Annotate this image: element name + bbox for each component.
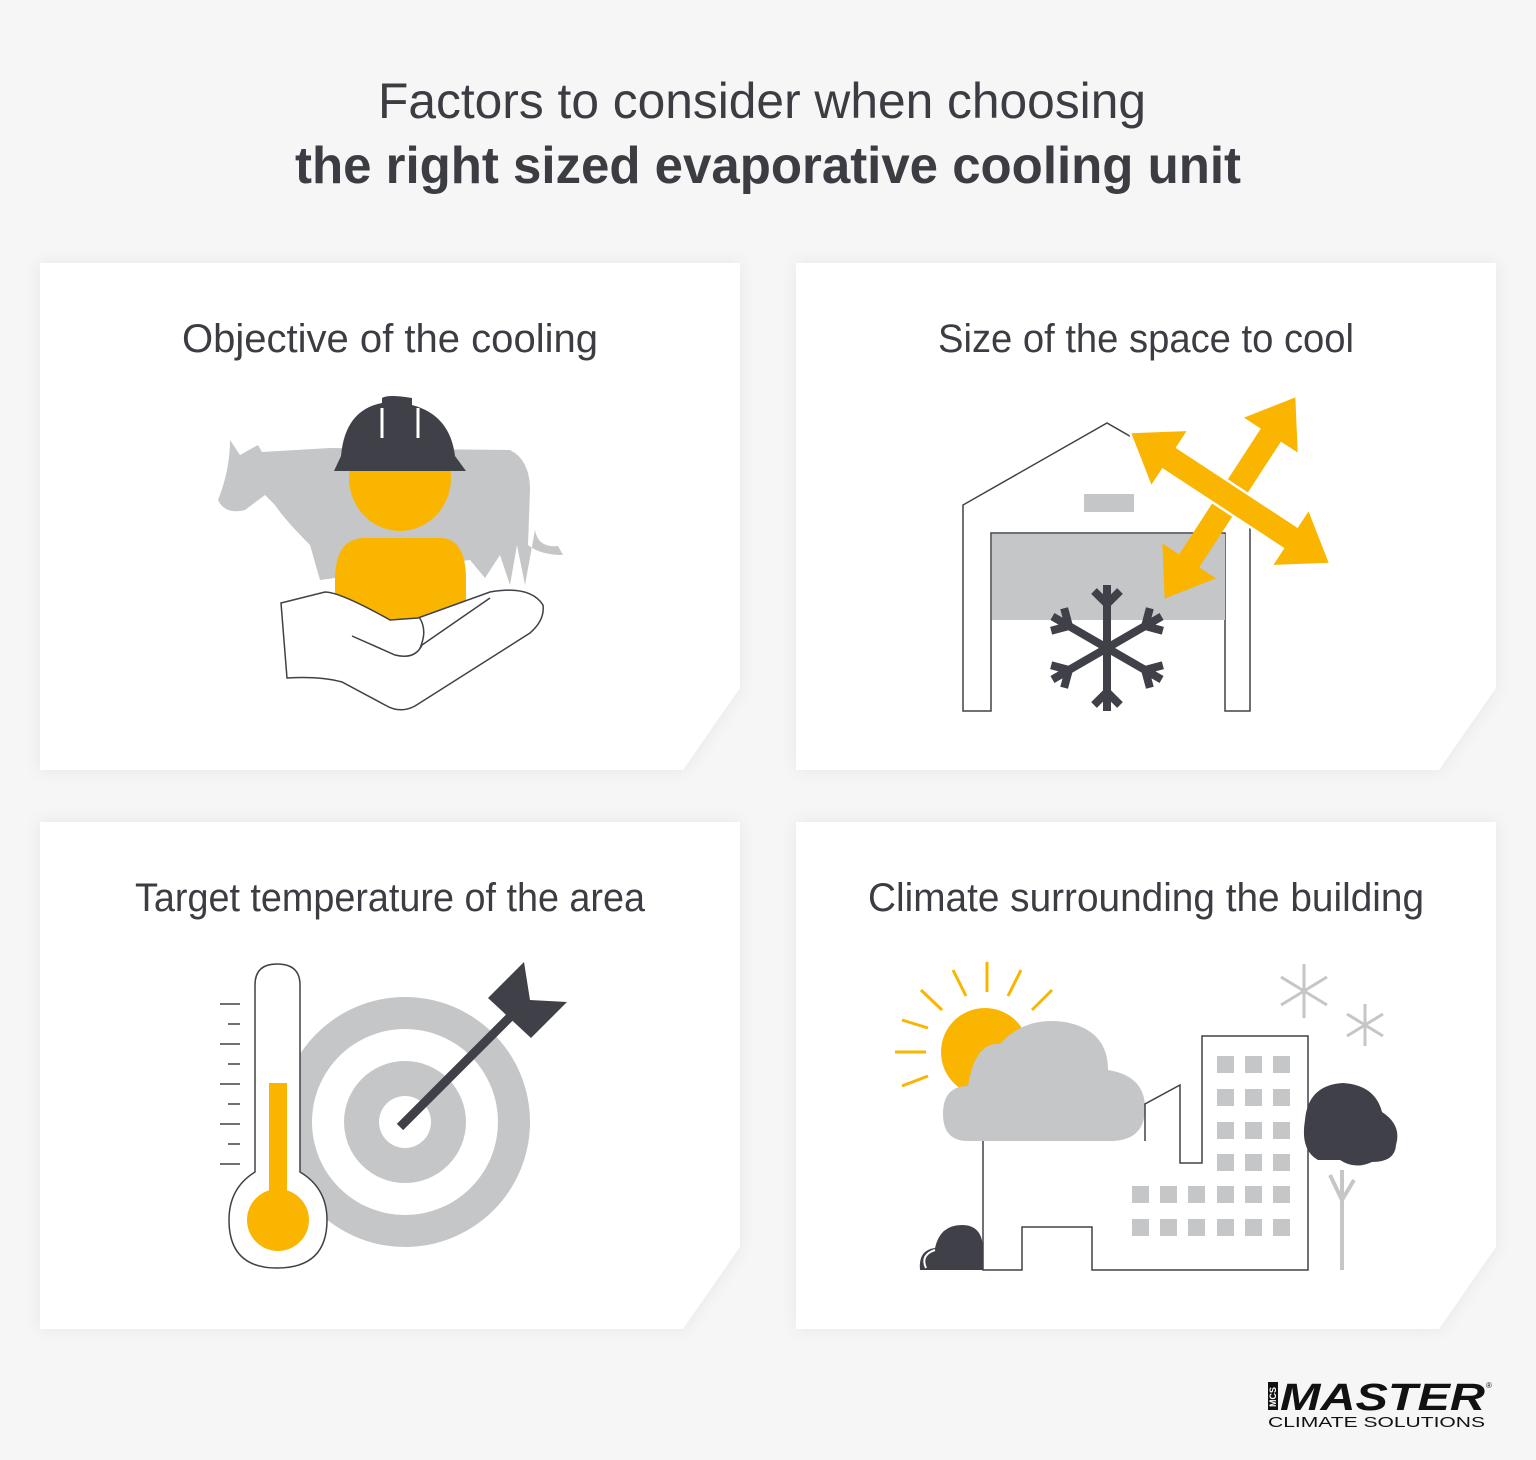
heading: size: Size of the space to cool (938, 317, 1354, 361)
panel: target temperature (40, 822, 740, 1329)
heading: objective: Objective of the cooling (182, 317, 598, 361)
icon: building with arrows (963, 380, 1346, 711)
icon: city climate (895, 962, 1397, 1270)
title (295, 73, 1241, 195)
icon: cow worker hand (218, 396, 563, 710)
icon: thermometer and target (220, 962, 567, 1268)
logo: ® (1486, 1381, 1492, 1390)
panel: size (796, 263, 1496, 770)
panel: climate (796, 822, 1496, 1329)
heading: climate: Climate surrounding the building (868, 876, 1424, 920)
logo (1268, 1377, 1492, 1431)
panel: objective (40, 263, 740, 770)
title: the right sized evaporative cooling unit (295, 137, 1241, 195)
heading: target: Target temperature of the area (135, 876, 646, 920)
title: Factors to consider when choosing (378, 73, 1146, 129)
logo: MCS (1268, 1387, 1278, 1407)
logo: CLIMATE SOLUTIONS (1268, 1414, 1485, 1431)
logo: MASTER (1280, 1377, 1486, 1419)
